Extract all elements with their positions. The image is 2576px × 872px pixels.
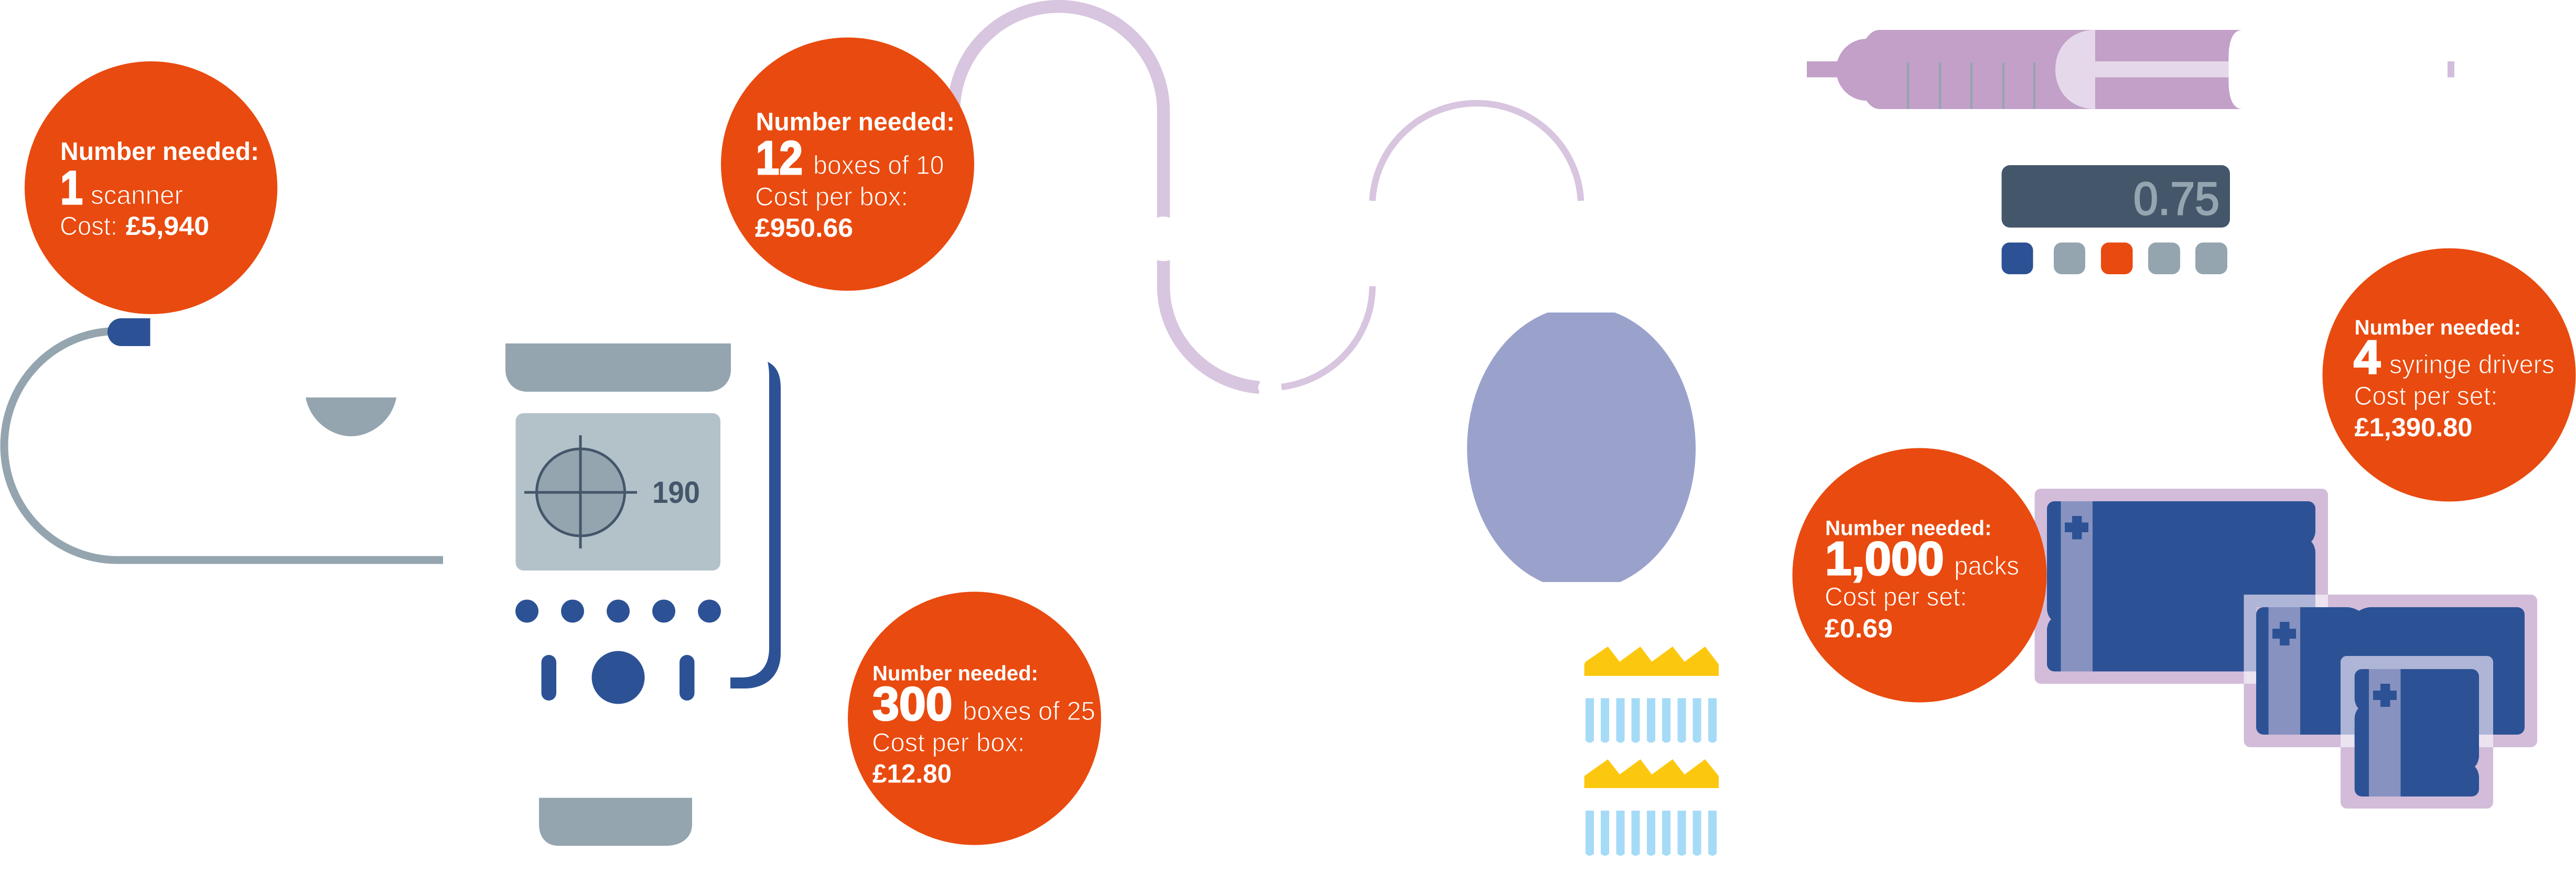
icon: bladder scanner device — [505, 343, 781, 846]
panel: boxes of 25 number needed circle: 300 — [872, 678, 952, 730]
icon: intravenous tubing — [954, 6, 1581, 394]
panel: boxes of 10 number needed circle: Cost per box: — [755, 182, 908, 211]
panel: scanner number needed circle: Cost: — [60, 211, 117, 241]
panel: scanner number needed circle: 1 — [60, 162, 83, 214]
panel: boxes of 10 number needed circle: £950.66 — [755, 213, 853, 242]
panel: packs number needed circle: Cost per set: — [1825, 582, 1967, 611]
icon: syringe driver display — [2002, 165, 2230, 274]
icon: infusion bag — [1467, 306, 1696, 590]
panel: syringe drivers number needed circle — [2323, 249, 2575, 501]
panel: boxes of 10 number needed circle: boxes of 10 — [813, 150, 944, 180]
panel: scanner number needed circle — [25, 61, 277, 314]
panel: packs number needed circle: £0.69 — [1825, 613, 1893, 643]
panel: boxes of 10 number needed circle: Number needed: — [756, 108, 955, 136]
panel: packs number needed circle: Number needed: — [1825, 517, 1991, 540]
panel: boxes of 25 number needed circle: boxes of 25 — [963, 696, 1095, 726]
panel: syringe drivers number needed circle: syringe drivers — [2389, 350, 2555, 379]
icon: syringe driver display: 0.75 — [2133, 173, 2219, 224]
panel: packs number needed circle: 1,000 — [1825, 533, 1944, 585]
panel: packs number needed circle: packs — [1954, 551, 2019, 580]
panel: boxes of 10 number needed circle: 12 — [756, 132, 803, 185]
icon: sterile pack small — [2341, 656, 2493, 809]
panel: syringe drivers number needed circle: Cost per set: — [2354, 381, 2498, 411]
icon: spring and coil connector — [1585, 647, 1719, 856]
panel: syringe drivers number needed circle: Number needed: — [2354, 316, 2521, 339]
panel: boxes of 25 number needed circle: Number needed: — [872, 662, 1038, 685]
panel: scanner number needed circle: Number needed: — [60, 138, 259, 166]
icon: bladder scanner device: 190 — [652, 476, 700, 510]
icon: sterile pack large — [2034, 489, 2328, 684]
panel: syringe drivers number needed circle: 4 — [2354, 331, 2380, 384]
panel: syringe drivers number needed circle: £1,390.80 — [2354, 413, 2473, 442]
icon: scanner probe cable — [4, 318, 443, 560]
panel: boxes of 25 number needed circle — [848, 591, 1101, 845]
panel: packs number needed circle — [1792, 448, 2047, 703]
icon: sterile pack medium — [2244, 595, 2537, 747]
panel: boxes of 10 number needed circle — [721, 38, 974, 290]
panel: scanner number needed circle: £5,940 — [126, 211, 209, 241]
panel: boxes of 25 number needed circle: Cost per box: — [872, 728, 1025, 757]
icon: syringe — [1807, 30, 2454, 109]
panel: scanner number needed circle: scanner — [91, 180, 183, 210]
panel: boxes of 25 number needed circle: £12.80 — [872, 759, 952, 789]
